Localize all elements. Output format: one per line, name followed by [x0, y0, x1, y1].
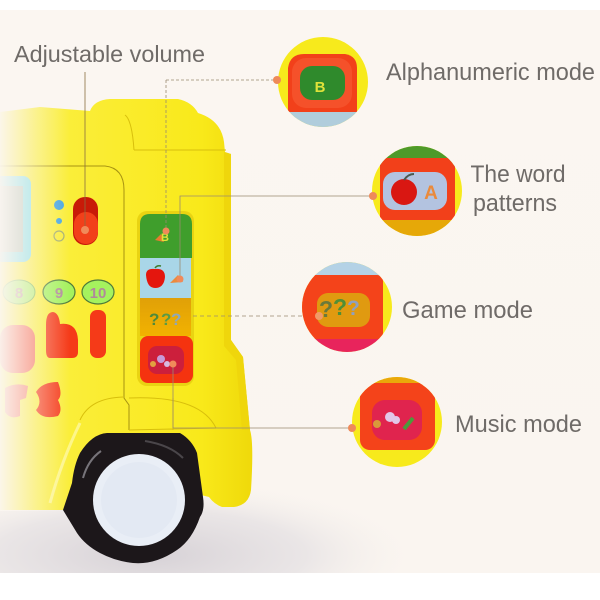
circle: game mode: ?: [333, 294, 347, 320]
circle: the word patterns: A: [424, 183, 438, 204]
number buttons: 10: [90, 285, 106, 302]
wheel: [63, 433, 204, 563]
left fade: [0, 90, 70, 511]
slider icons: [155, 234, 164, 242]
body shade right edge: [224, 152, 250, 430]
label: music mode: Music mode: [455, 411, 582, 438]
letter buttons: [0, 310, 106, 417]
circle: the word patterns: [372, 146, 462, 237]
dot: music mode: [348, 424, 356, 432]
seam lines: [80, 115, 226, 430]
bus body: [0, 99, 252, 510]
callout dots on toy: [81, 226, 184, 368]
mode slider: B: [161, 232, 169, 244]
label: alphanumeric mode: Alphanumeric mode: [386, 59, 595, 86]
label: adjustable volume: Adjustable volume: [14, 41, 205, 67]
circle: game mode: [300, 262, 392, 354]
mode slider: [137, 211, 194, 386]
label: game mode: Game mode: [402, 297, 533, 324]
number buttons: 8: [15, 285, 23, 302]
number buttons: 9: [55, 285, 63, 302]
mode slider: ?: [149, 310, 159, 329]
fender highlight: [50, 423, 80, 503]
number buttons: [3, 280, 114, 304]
toy bus illustration: [0, 90, 252, 563]
dot: alphanumeric: [273, 76, 281, 84]
callout lines: [85, 72, 372, 428]
panel outline: [0, 166, 129, 430]
circle: alphanumeric mode: [277, 37, 369, 131]
mode slider: ?: [161, 310, 171, 329]
dot: word patterns: [369, 192, 377, 200]
dot: game mode: [315, 312, 323, 320]
circle: game mode: ?: [319, 296, 333, 322]
circle: music mode: [352, 377, 442, 467]
screen: [0, 176, 31, 262]
volume switch: [73, 197, 98, 245]
mode slider: ?: [171, 310, 181, 329]
label: the word patterns: The word: [470, 161, 566, 188]
circle: alphanumeric mode: B: [315, 79, 326, 96]
circle: game mode: ?: [347, 297, 360, 320]
text: patterns: [473, 190, 557, 217]
indicator lights: [54, 200, 64, 241]
